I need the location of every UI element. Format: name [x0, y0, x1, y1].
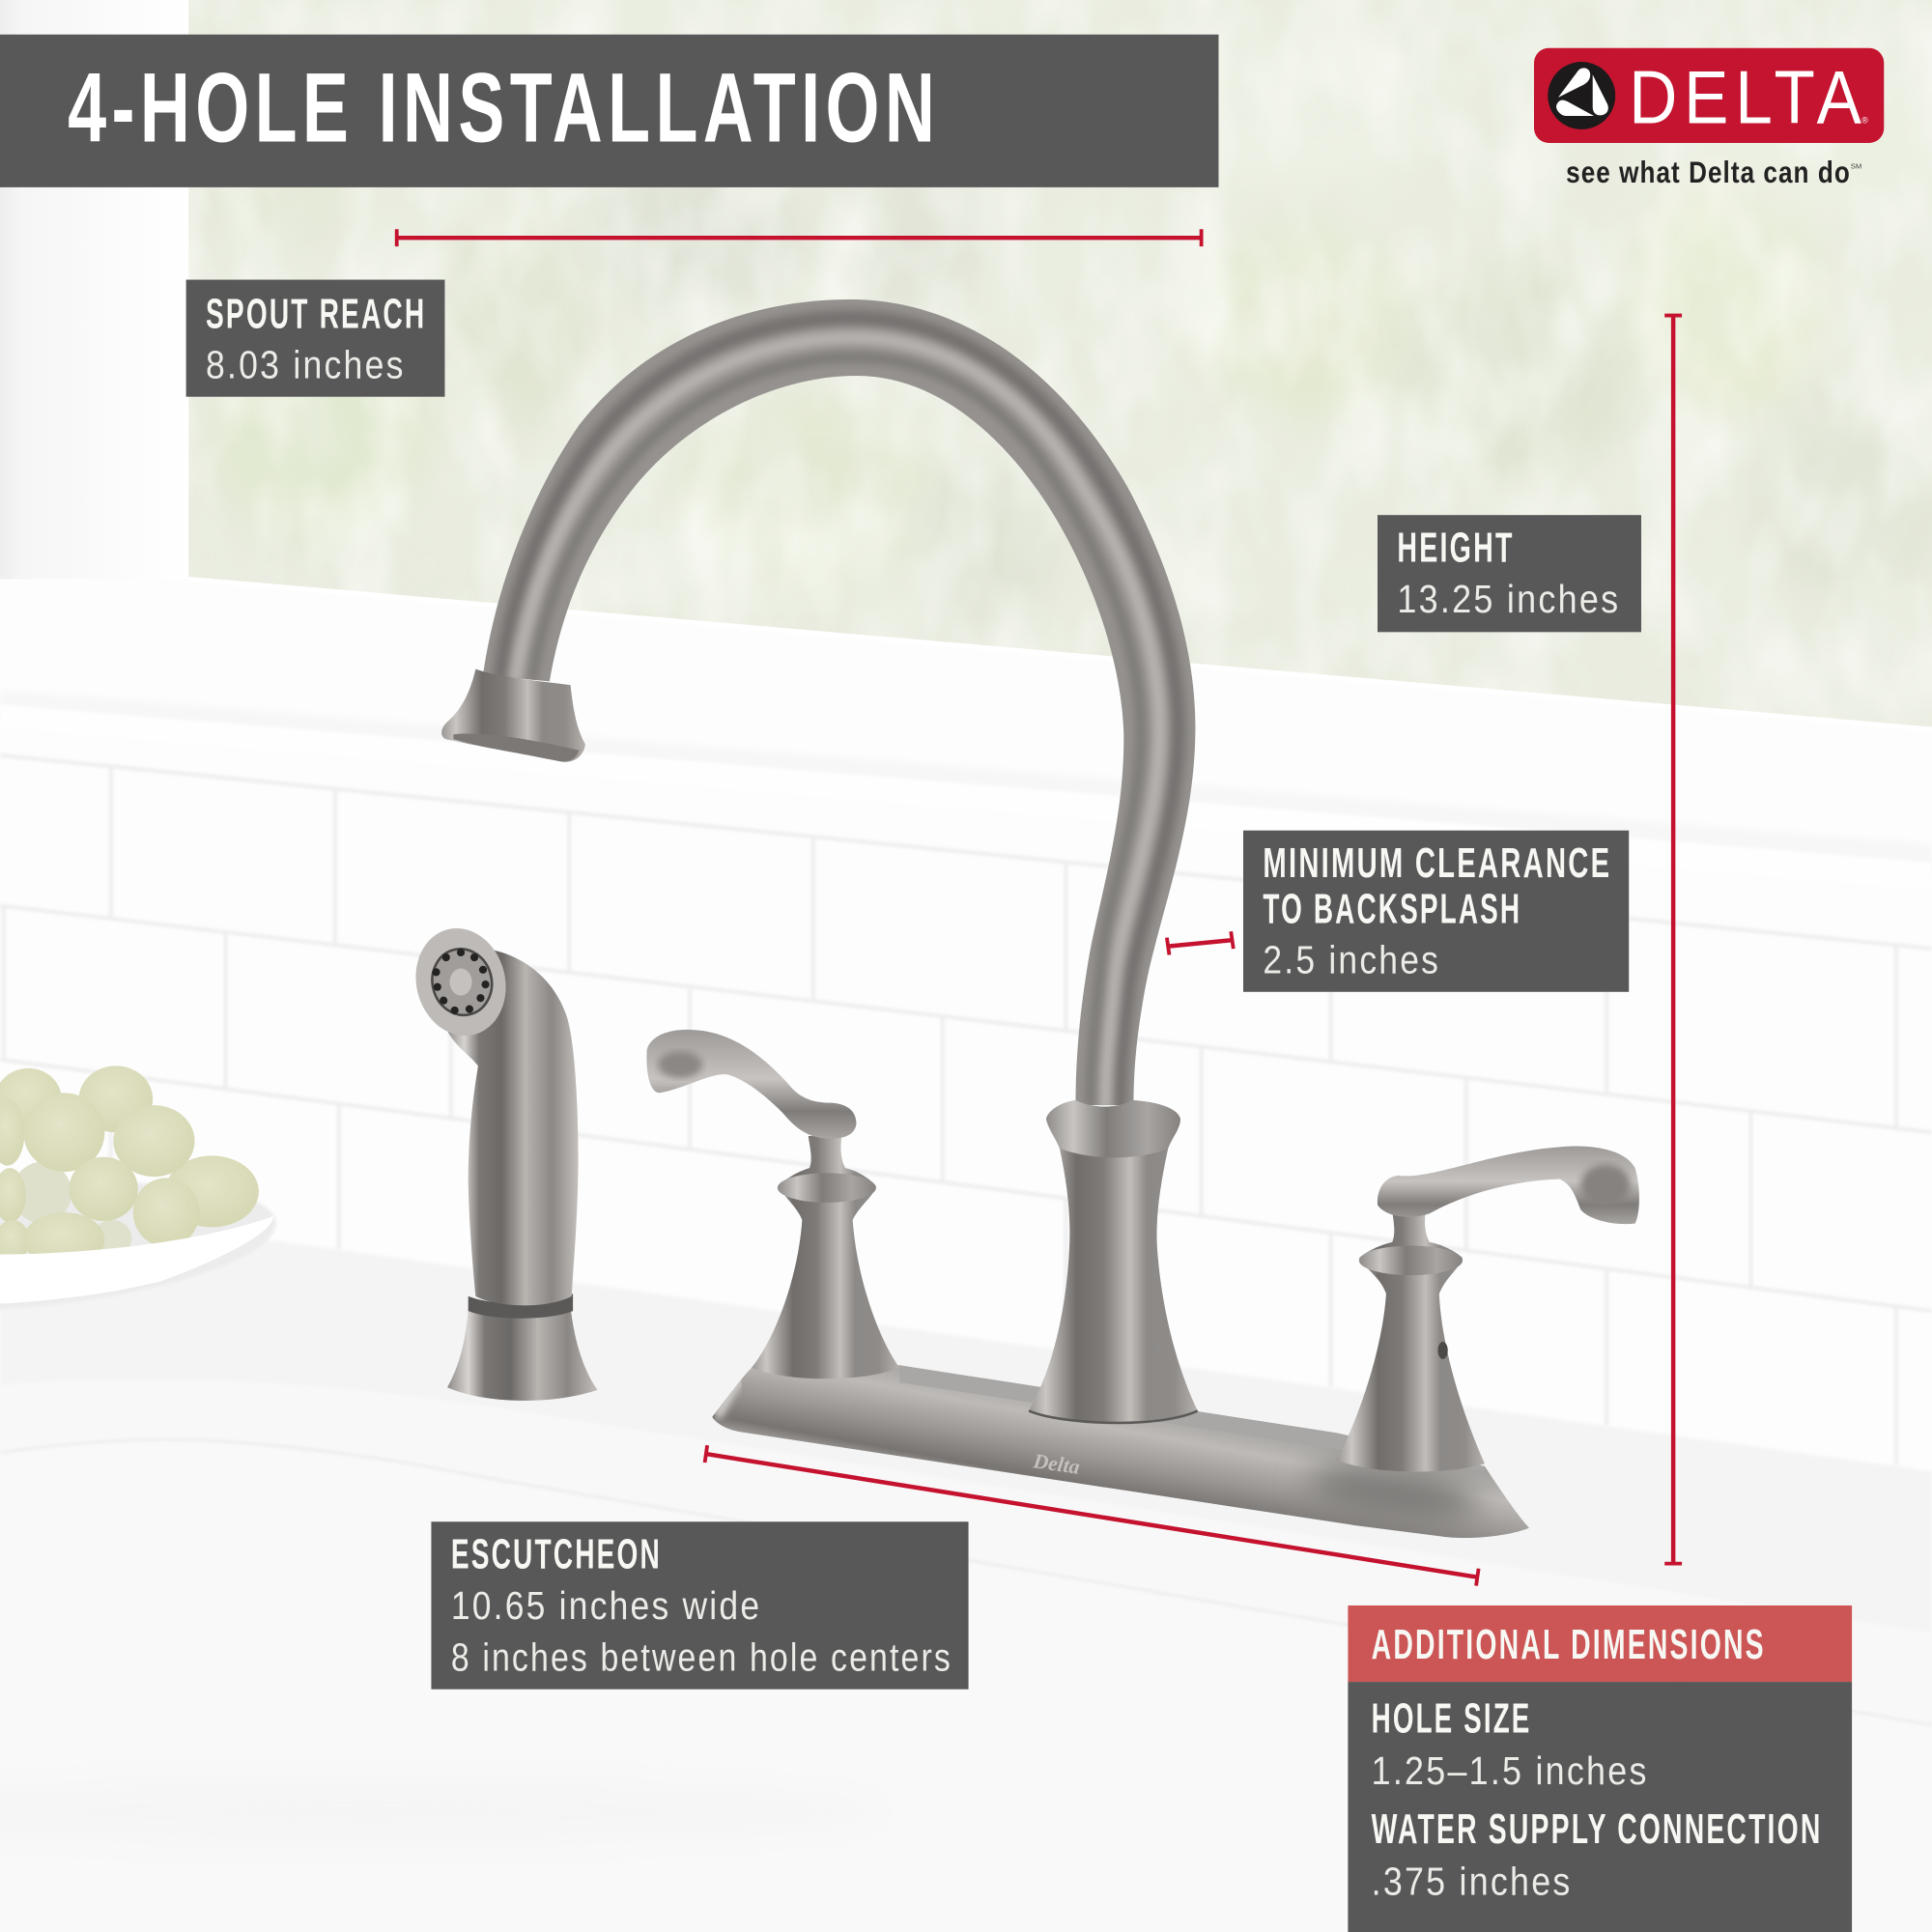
panel: spout reach: 8.03 inches: [206, 343, 406, 387]
additional dimensions body: HOLE SIZE: [1372, 1695, 1531, 1742]
background: subway tile grout lines: [0, 755, 1932, 1466]
sprayer base: [447, 1306, 598, 1401]
registered mark: ®: [1861, 116, 1868, 126]
dimension line: minimum clearance: [1167, 931, 1234, 955]
dimension line: height: [1664, 316, 1682, 1564]
side sprayer: [405, 919, 598, 1401]
panel: minimum clearance: 2.5 inches: [1263, 938, 1440, 982]
panel: minimum clearance: TO BACKSPLASH: [1263, 886, 1521, 932]
panel: additional dimensions: [1348, 1605, 1852, 1932]
background: marble countertop: [0, 1203, 1932, 1932]
panel: escutcheon: ESCUTCHEON: [451, 1532, 662, 1578]
background: window sill and ledge: [0, 579, 1932, 890]
panel: height: HEIGHT: [1397, 526, 1515, 572]
nozzle underside: [453, 733, 579, 761]
panel: escutcheon: [431, 1521, 969, 1690]
dimension line: escutcheon: [705, 1445, 1479, 1586]
panel: escutcheon: 10.65 inches wide: [451, 1583, 761, 1628]
plate of grapes: [0, 1065, 282, 1331]
additional dimensions header: [1348, 1605, 1852, 1682]
right handle collar: [1359, 1246, 1463, 1275]
additional dimensions body: 1.25–1.5 inches: [1372, 1748, 1649, 1793]
right handle lever: [1378, 1147, 1639, 1224]
right handle set screw: [1438, 1342, 1448, 1359]
background: blurred greenery through window: [188, 0, 1932, 739]
right lever end shading: [1580, 1164, 1631, 1207]
left handle collar: [778, 1173, 876, 1203]
additional dimensions body: .375 inches: [1372, 1860, 1573, 1904]
spout nozzle: [441, 669, 585, 762]
panel: escutcheon: 8 inches between hole centers: [451, 1635, 952, 1680]
Delta logo: [1534, 48, 1884, 189]
panel: minimum clearance: [1243, 831, 1629, 992]
central faucet body: [1029, 1100, 1198, 1423]
panel: height: 13.25 inches: [1397, 577, 1620, 621]
left handle lever: [646, 1030, 856, 1139]
dimension line: spout reach: [397, 229, 1202, 246]
brand mark on base: Delta: [1031, 1449, 1081, 1479]
right handle: [1337, 1147, 1639, 1471]
logo emblem: [1548, 62, 1615, 129]
service mark: SM: [1851, 162, 1861, 171]
left handle cone: [752, 1136, 899, 1378]
plate back: [0, 1163, 282, 1331]
sprayer head face: [405, 919, 517, 1045]
escutcheon base plate: [712, 1365, 1529, 1538]
left handle: [646, 1030, 899, 1378]
logo badge: [1534, 48, 1884, 143]
background: window frame: [0, 0, 188, 579]
right handle cone: [1337, 1211, 1485, 1471]
panel: minimum clearance: MINIMUM CLEARANCE: [1263, 840, 1611, 887]
logo wordmark: DELTA: [1629, 57, 1868, 140]
spout tube: [483, 299, 1195, 1105]
panel: spout reach: [186, 280, 444, 397]
grapes: [0, 1065, 259, 1266]
additional dimensions body: [1348, 1682, 1852, 1932]
title: 4-HOLE INSTALLATION: [68, 53, 940, 163]
title bar: [0, 35, 1218, 187]
background: sink rim and basin: [0, 1379, 1932, 1932]
left lever end shading: [658, 1051, 702, 1078]
tagline: see what Delta can do: [1566, 155, 1851, 189]
plate front lip: [0, 1216, 273, 1303]
faucet: [441, 299, 1639, 1538]
panel: spout reach: SPOUT REACH: [206, 291, 426, 337]
sprayer ring: [469, 1293, 573, 1319]
panel: height: [1378, 515, 1641, 632]
sprayer body: [446, 949, 579, 1305]
